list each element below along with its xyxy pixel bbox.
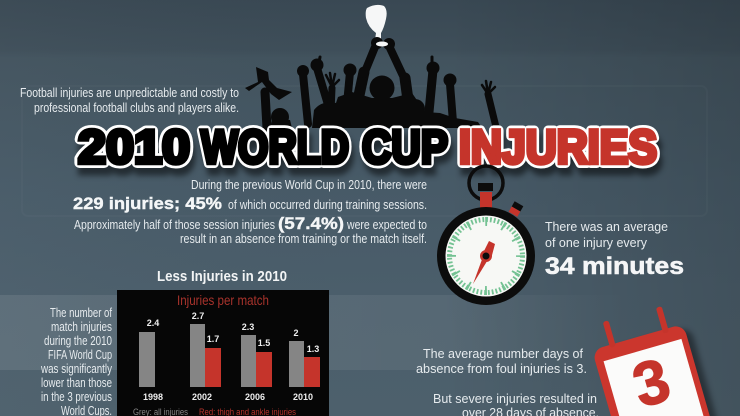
icon: crowd silhouette with trophy	[245, 5, 496, 128]
intro text: Football injuries are unpredictable and costly to	[20, 85, 239, 100]
bar chart: injuries per match: 2.3	[242, 322, 254, 332]
bar chart: injuries per match: 2002	[192, 392, 212, 402]
text block: match injuries: match injuries	[51, 319, 112, 334]
text block: match injuries: in the 3 previous	[41, 389, 112, 404]
heading: less injuries: Less Injuries in 2010	[157, 268, 287, 285]
text block: match injuries: was significantly	[40, 361, 112, 376]
title: INJURIES	[459, 120, 657, 173]
text block: match injuries: FIFA World Cup	[48, 347, 112, 362]
title	[78, 120, 660, 181]
title: WORLD	[204, 128, 352, 181]
bar chart: injuries per match: 1.5	[258, 338, 270, 348]
title: CUP	[362, 120, 448, 173]
icon: calendar	[585, 299, 721, 416]
text block: days of absence: The average number days of	[423, 346, 583, 361]
text block: match injuries: during the 2010	[44, 333, 112, 348]
title: 2010	[81, 128, 193, 181]
text block: 229 injuries: were expected to	[346, 217, 427, 232]
title: CUP	[362, 120, 448, 173]
bar chart: injuries per match: 1.7	[207, 334, 219, 344]
bar chart: injuries per match: 2006	[245, 392, 265, 402]
intro text	[20, 85, 239, 115]
bar chart: injuries per match: 2.7	[192, 311, 204, 321]
title: 2010	[78, 120, 190, 173]
icon: trophy	[366, 5, 387, 40]
bar chart: injuries per match: 1998	[143, 392, 163, 402]
callout: 34 minutes	[545, 219, 684, 280]
chart title: Injuries per match	[177, 292, 269, 308]
text block: 229 injuries	[73, 177, 427, 246]
text block: match injuries: lower than those	[41, 375, 112, 390]
text block: match injuries: The number of	[50, 305, 112, 320]
icon: stopwatch	[437, 166, 535, 305]
intro text: professional football clubs and players alike.	[34, 100, 239, 115]
text block: 229 injuries: Approximately half of those session injuries	[74, 217, 275, 232]
text block: 229 injuries: (57.4%)	[278, 214, 344, 233]
text block: days of absence: But severe injuries resulted in	[433, 391, 597, 406]
text block: 229 injuries: During the previous World Cup in 2010, there were	[191, 177, 427, 192]
title: WORLD	[201, 120, 349, 173]
text block: days of absence	[416, 346, 599, 416]
title: INJURIES	[459, 120, 657, 173]
title: WORLD	[201, 120, 349, 173]
text block: 229 injuries: 229 injuries; 45%	[73, 194, 222, 213]
callout: 34 minutes: of one injury every	[545, 235, 647, 250]
title: CUP	[365, 128, 451, 181]
text block: match injuries	[40, 305, 112, 416]
text block: 229 injuries: result in an absence from training or the match itself.	[180, 231, 427, 246]
text block: 229 injuries: of which occurred during training sessions.	[228, 197, 427, 212]
title: INJURIES	[462, 128, 660, 181]
bar chart: injuries per match: 2.4	[147, 318, 159, 328]
bar chart: injuries per match	[117, 290, 329, 416]
bar chart: injuries per match: 2010	[293, 392, 313, 402]
bar chart: injuries per match: 1.3	[307, 344, 319, 354]
text block: days of absence: absence from foul injuries is 3.	[416, 361, 587, 376]
callout: 34 minutes: There was an average	[545, 219, 668, 234]
callout: 34 minutes: 34 minutes	[545, 253, 684, 280]
bar chart: injuries per match: 2	[293, 328, 299, 338]
title: 2010	[78, 120, 190, 173]
